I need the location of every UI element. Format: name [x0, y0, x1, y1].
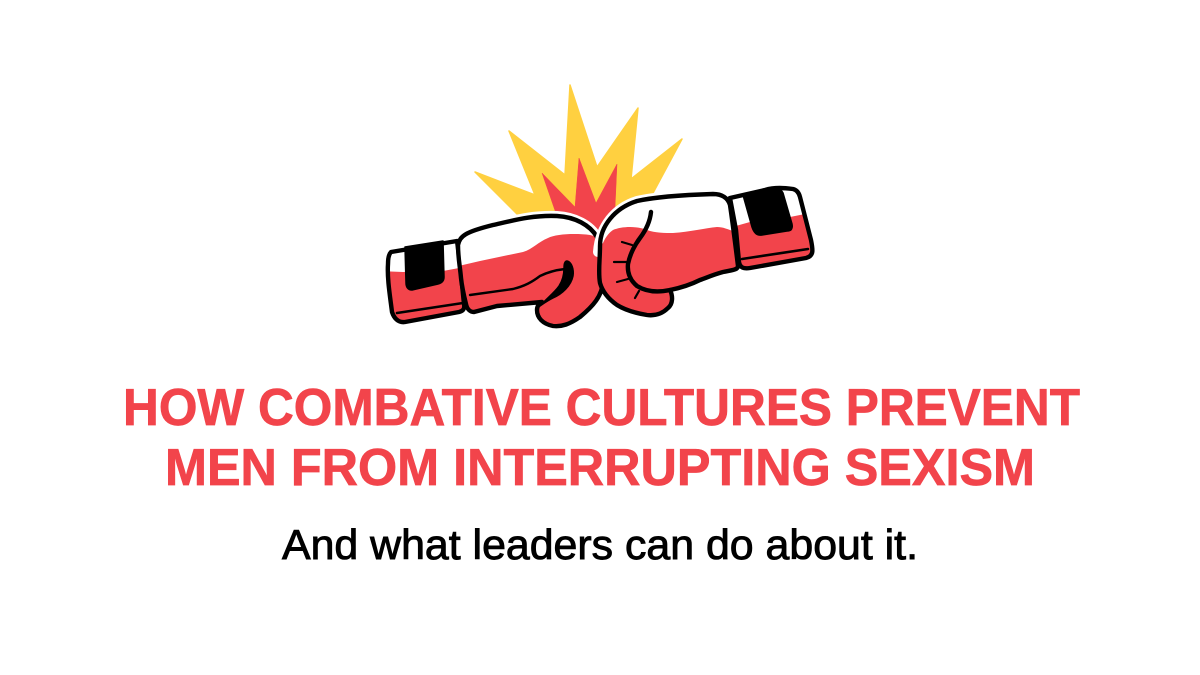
title line 2: MEN FROM INTERRUPTING SEXISM	[165, 439, 1035, 497]
icon: left boxing glove	[386, 210, 602, 328]
title line 1: HOW COMBATIVE CULTURES PREVENT	[123, 379, 1080, 437]
right glove thumb curve	[628, 212, 670, 291]
title	[123, 379, 1080, 497]
subtitle: And what leaders can do about it.	[282, 521, 918, 568]
icon: clashing boxing gloves with explosion	[380, 85, 820, 330]
glove white halo	[598, 194, 700, 252]
right cuff	[737, 214, 810, 266]
right glove body	[601, 204, 736, 313]
right glove stitches	[614, 242, 639, 298]
left glove thumb line	[470, 269, 565, 295]
icon: yellow explosion burst	[475, 85, 682, 240]
icon: red inner burst	[542, 158, 617, 250]
left glove body	[460, 234, 600, 324]
left cuff	[390, 268, 462, 320]
glove white halo	[458, 216, 603, 262]
icon: right boxing glove	[595, 180, 820, 320]
